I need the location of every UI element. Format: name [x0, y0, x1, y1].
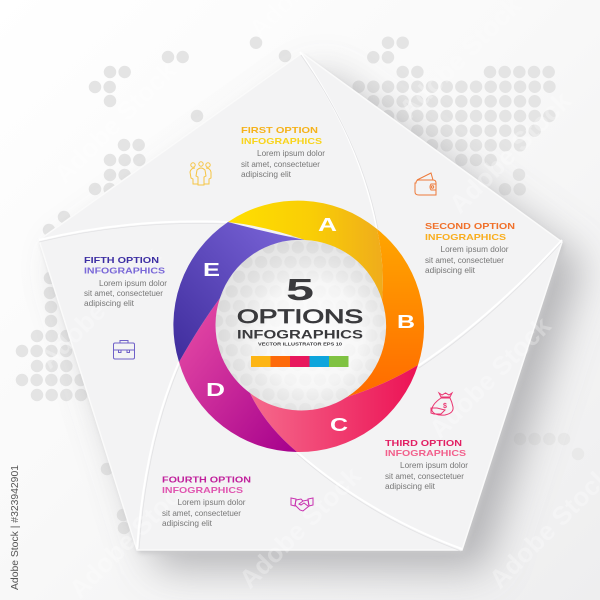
panel: pentagon	[39, 52, 564, 553]
text block: first option: INFOGRAPHICS	[241, 136, 322, 146]
watermarks: Adobe Stock	[33, 240, 167, 374]
ring	[173, 201, 424, 452]
center disc	[212, 236, 388, 412]
text block: fifth option	[84, 255, 167, 308]
color bar	[251, 356, 348, 367]
icon: wallet	[415, 173, 436, 195]
subtitle: VECTOR ILLUSTRATOR EPS 10	[258, 342, 343, 346]
text block: third option: THIRD OPTION	[385, 438, 462, 448]
segment B	[347, 229, 424, 397]
segment C	[250, 365, 418, 452]
text block: third option	[385, 438, 468, 491]
letter E: E	[203, 260, 220, 280]
text block: second option	[425, 221, 515, 275]
text block: second option: adipiscing elit	[425, 265, 476, 275]
text block: first option: adipiscing elit	[241, 169, 292, 179]
watermarks: Adobe Stock	[233, 460, 367, 594]
text block: fourth option: INFOGRAPHICS	[162, 485, 243, 495]
icon: people	[190, 162, 211, 185]
infographics: INFOGRAPHICS	[237, 328, 363, 342]
text block: second option: SECOND OPTION	[425, 221, 515, 231]
watermarks: Adobe Stock	[443, 85, 577, 219]
text block: third option: adipiscing elit	[385, 481, 436, 491]
number 5: 5	[286, 272, 314, 307]
text block: third option: sit amet, consectetuer	[385, 471, 464, 481]
watermarks: Adobe Stock	[48, 55, 182, 189]
letter B: B	[397, 312, 415, 332]
options: OPTIONS	[237, 307, 363, 328]
segment D	[179, 298, 297, 452]
text block: fourth option: sit amet, consectetuer	[162, 508, 241, 518]
text block: fifth option: INFOGRAPHICS	[84, 266, 165, 276]
icon: handshake	[291, 498, 313, 511]
text block: fifth option: sit amet, consectetuer	[84, 288, 163, 298]
adobe stock id: Adobe Stock | #323942901	[9, 465, 21, 590]
text block: second option: Lorem ipsum dolor	[440, 244, 509, 254]
text block: second option: INFOGRAPHICS	[425, 232, 506, 242]
text block: fourth option: FOURTH OPTION	[162, 474, 251, 484]
text block: fifth option: Lorem ipsum dolor	[99, 278, 167, 288]
world map dots	[22, 43, 579, 528]
pentagon shadow	[61, 73, 584, 570]
text block: first option: Lorem ipsum dolor	[257, 148, 325, 158]
segment E	[173, 222, 305, 362]
center title	[237, 272, 363, 346]
text block: second option: sit amet, consectetuer	[425, 255, 504, 265]
text block: fourth option: adipiscing elit	[162, 518, 213, 528]
text block: first option: FIRST OPTION	[241, 125, 318, 135]
text block: fourth option: Lorem ipsum dolor	[178, 497, 246, 507]
text block: first option: sit amet, consectetuer	[241, 159, 320, 169]
segment A	[228, 201, 383, 300]
icon: money bag	[431, 393, 453, 415]
text block: fifth option: adipiscing elit	[84, 298, 135, 308]
text block: fifth option: FIFTH OPTION	[84, 255, 159, 265]
letter A: A	[318, 215, 337, 235]
text block: third option: Lorem ipsum dolor	[400, 460, 468, 470]
text block: fourth option	[162, 474, 251, 528]
icon: briefcase	[114, 340, 134, 359]
watermarks: Adobe Stock	[423, 310, 557, 444]
icon: money bag: $	[443, 403, 447, 410]
letter D: D	[206, 380, 225, 400]
letter C: C	[330, 415, 348, 435]
text block: third option: INFOGRAPHICS	[385, 448, 466, 458]
text block: first option	[241, 125, 325, 179]
